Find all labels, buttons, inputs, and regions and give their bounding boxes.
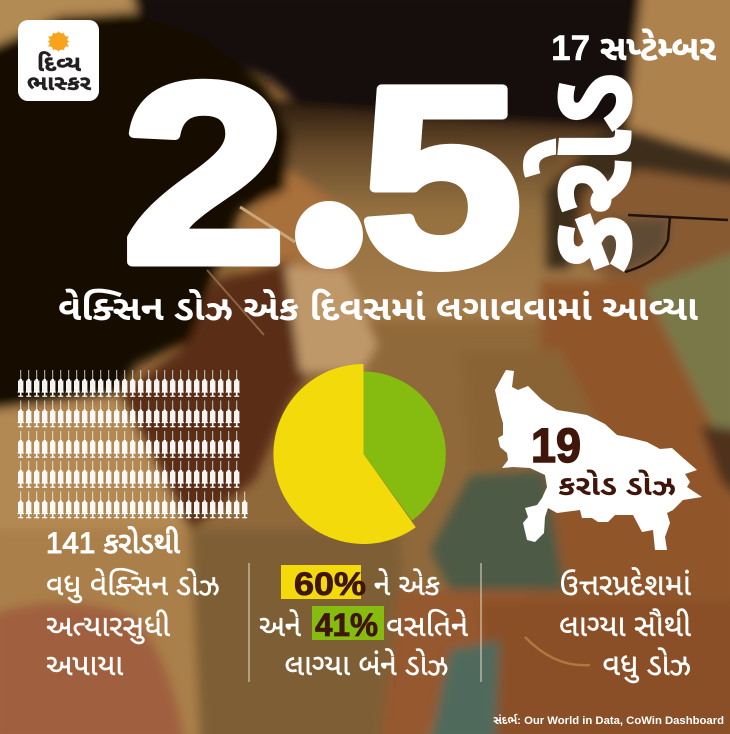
text block: Uttar Pradesh received the most doses: ઉત્તરપ્રદેશમાં bbox=[560, 566, 691, 602]
highlight: 41% bbox=[312, 606, 384, 640]
vertical word: crore: કરોડ bbox=[524, 74, 656, 272]
text block: 141 crore doses so far: 141 કરોડથી bbox=[46, 526, 180, 560]
text block: 141 crore doses so far: અપાયા bbox=[46, 649, 123, 682]
subheading: vaccine doses administered in one day: વેક્સિન ડોઝ એક દિવસમાં લગાવવામાં આવ્યા bbox=[58, 288, 699, 328]
headline number 2.5: 5 bbox=[360, 35, 522, 320]
map: Uttar Pradesh with 19 crore doses bbox=[495, 370, 702, 550]
pie slice: green 41% bbox=[364, 372, 446, 521]
divider bbox=[480, 563, 482, 682]
text block: Uttar Pradesh received the most doses bbox=[559, 566, 691, 683]
highlight: 60% bbox=[281, 565, 361, 599]
text block: 60% and 41% population coverage: અને bbox=[259, 608, 302, 643]
label: crore doses: કરોડ ડોઝ bbox=[558, 470, 676, 501]
text block: 60% and 41% population coverage: વસતિને bbox=[386, 608, 469, 643]
text block: 141 crore doses so far bbox=[46, 526, 220, 682]
divider bbox=[248, 563, 250, 682]
text block: 60% and 41% population coverage: ને એક bbox=[374, 567, 440, 602]
headline number 2.5 bbox=[122, 30, 522, 320]
text block: 60% and 41% population coverage bbox=[259, 565, 469, 682]
text block: 60% and 41% population coverage: લાગ્યા બંને ડોઝ bbox=[285, 647, 448, 682]
pie chart: 60% one dose, 41% both doses bbox=[273, 364, 446, 544]
text block: Uttar Pradesh received the most doses: વધુ ડોઝ bbox=[602, 647, 691, 683]
logo: Divya Bhaskar bbox=[18, 20, 99, 101]
source note: સંદર્ભ: Our World in Data, CoWin Dashboard bbox=[493, 713, 724, 727]
icon: sun bbox=[48, 31, 69, 52]
stat: 19: 19 bbox=[531, 420, 581, 473]
headline number 2.5: 2 bbox=[122, 30, 287, 317]
text block: 60% and 41% population coverage: 41% bbox=[315, 607, 378, 643]
logo: Divya Bhaskar: ભાસ્કર bbox=[27, 72, 91, 95]
logo: Divya Bhaskar: દિવ્ય bbox=[37, 51, 81, 76]
text block: Uttar Pradesh received the most doses: લાગ્યા સૌથી bbox=[559, 608, 691, 643]
pie slice: yellow 60% bbox=[273, 364, 416, 544]
text block: 141 crore doses so far: અત્યારસુધી bbox=[46, 609, 170, 644]
text block: 60% and 41% population coverage: 60% bbox=[294, 566, 366, 602]
pictogram: rows of syringes bbox=[18, 370, 248, 518]
date: 17 September: 17 સપ્ટેમ્બર bbox=[551, 29, 716, 68]
text block: 141 crore doses so far: વધુ વેક્સિન ડોઝ bbox=[46, 567, 220, 603]
headline number 2.5: . bbox=[300, 154, 333, 288]
